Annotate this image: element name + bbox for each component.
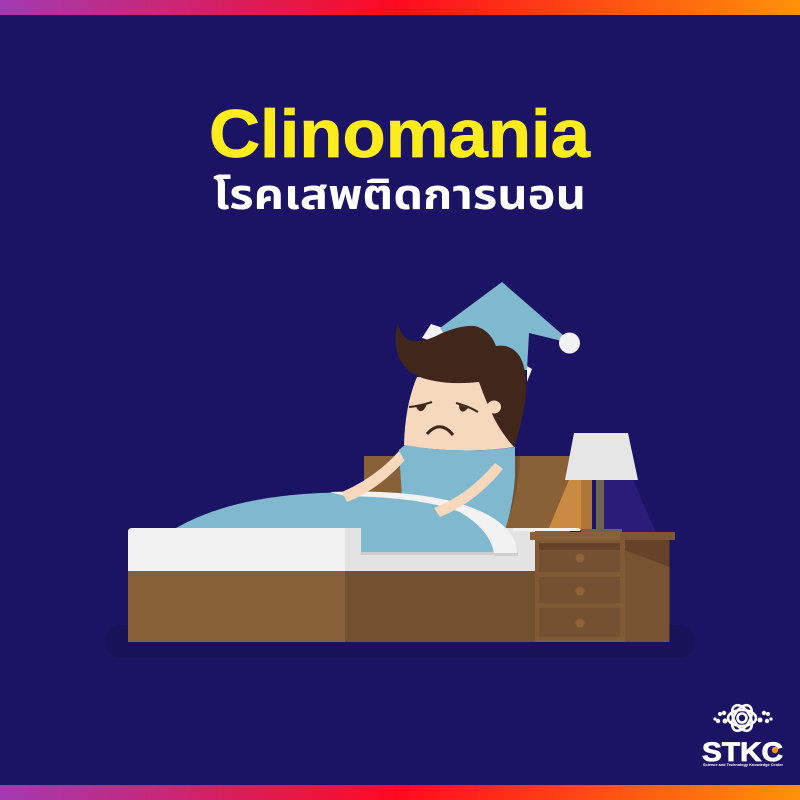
right arm: [434, 463, 503, 517]
mattress: [128, 528, 581, 572]
eyes and eyebrows: [409, 402, 478, 412]
nightstand: [530, 532, 675, 642]
lamp: [565, 433, 638, 533]
title: Clinomania: Clinomania: [209, 96, 591, 172]
hair: [395, 323, 526, 447]
headboard: [364, 456, 570, 536]
bottom gradient bar: [0, 785, 800, 800]
bed frame: [128, 571, 535, 642]
ear: [487, 400, 501, 414]
man: [395, 282, 580, 530]
logo tagline: Science and Technology Knowledge Center: [703, 762, 783, 767]
logo atom icon: [713, 702, 773, 734]
top gradient bar: [0, 0, 800, 15]
left sleeve: [399, 445, 405, 462]
left arm: [342, 451, 405, 502]
shirt: [399, 445, 515, 530]
blanket: [176, 445, 518, 556]
illustration: sleepy man in bed: [105, 282, 695, 658]
logo orange dot: [772, 747, 778, 753]
STKC logo: [702, 702, 783, 767]
drawers: [539, 543, 620, 637]
face: [404, 377, 514, 451]
mouth: [427, 427, 453, 435]
floor shadow: [105, 625, 695, 658]
lamp light cones: [548, 480, 656, 532]
subtitle: Thai: โรคเสพติดการนอน: [213, 171, 586, 218]
logo wordmark: STKC: [702, 737, 783, 767]
nightcap: [422, 282, 580, 382]
